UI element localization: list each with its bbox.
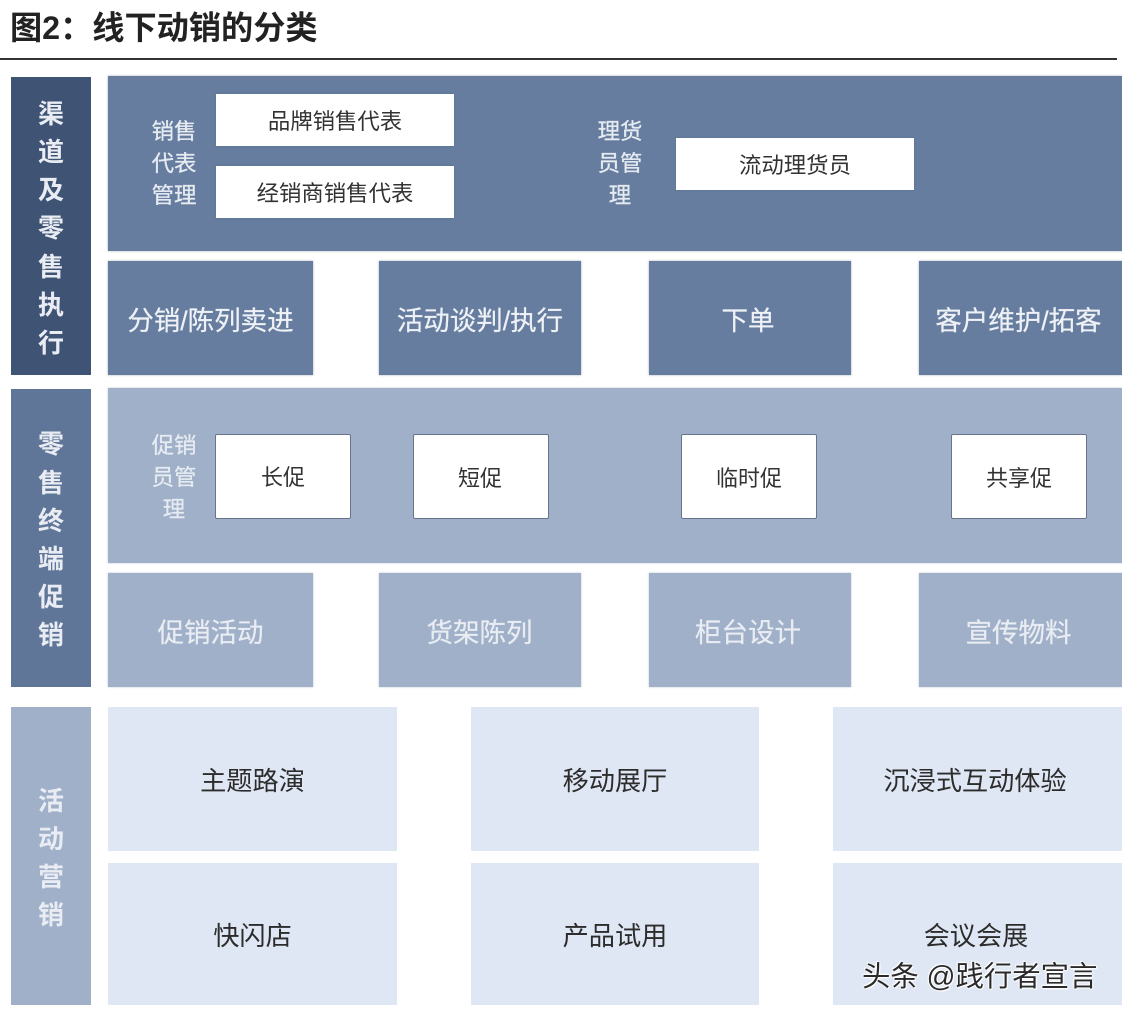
box: immersive experience: 沉浸式互动体验 [883,766,1067,796]
box: ordering [649,261,851,375]
box: shared promoter: 共享促 [986,466,1052,490]
box: mobile stock staff [676,138,914,190]
box: temporary promoter [681,434,817,519]
label: sales rep management [152,119,196,208]
heading: event marketing: 营 [38,862,64,892]
box: activity negotiation: 活动谈判/执行 [397,306,563,336]
heading: retail terminal promotion: 零 [38,429,64,459]
heading: channel and retail execution: 渠 [38,99,64,129]
label: stock staff management [598,119,642,208]
label: promoter management [152,433,196,522]
heading: channel and retail execution: 执 [38,290,64,320]
heading: retail terminal promotion: 终 [38,506,64,536]
promoter band [108,388,1122,563]
panel: channel and retail execution [11,74,1122,376]
label: promoter management: 员管 [152,465,196,490]
heading: event marketing [11,707,91,1005]
box: mobile showroom: 移动展厅 [563,766,667,796]
label: sales rep management: 销售 [152,119,196,144]
label: sales rep management: 代表 [152,151,196,176]
box: mobile showroom [471,707,759,851]
box: brand sales rep [216,94,454,146]
heading: channel and retail execution [11,77,91,375]
heading: event marketing: 动 [38,824,64,854]
heading: channel and retail execution: 售 [38,252,64,282]
panel: retail terminal promotion [11,387,1122,688]
box: mobile stock staff: 流动理货员 [739,153,851,178]
heading: retail terminal promotion: 端 [38,544,64,574]
box: conferences and exhibitions [833,863,1122,1005]
title: 图2：线下动销的分类 [10,10,318,46]
heading: channel and retail execution: 零 [38,213,64,243]
box: long-term promoter: 长促 [261,464,305,490]
box: customer maintenance: 客户维护/拓客 [935,306,1102,336]
box: pop-up store: 快闪店 [213,921,292,951]
heading: channel and retail execution: 行 [38,328,64,358]
panel: event marketing [11,707,1122,1005]
box: conferences and exhibitions: 会议会展 [924,921,1028,951]
box: product trial [471,863,759,1005]
heading: event marketing: 活 [38,786,64,816]
box: product trial: 产品试用 [563,921,667,951]
box: themed roadshow: 主题路演 [200,766,305,796]
box: distribution and display [108,261,313,375]
label: promoter management: 促销 [152,433,196,458]
box: promotional materials [919,573,1122,687]
box: ordering: 下单 [722,306,774,336]
box: distributor sales rep [216,166,454,218]
heading: retail terminal promotion: 销 [38,620,64,650]
sales and stock staff band [108,76,1122,251]
heading: retail terminal promotion: 促 [38,582,64,612]
box: immersive experience [833,707,1122,851]
box: short-term promoter: 短促 [458,466,502,490]
box: pop-up store [108,863,397,1005]
box: shared promoter [951,434,1087,519]
heading: retail terminal promotion [11,389,91,687]
box: brand sales rep: 品牌销售代表 [268,109,402,134]
label: sales rep management: 管理 [152,183,196,208]
box: short-term promoter [413,434,549,519]
box: distributor sales rep: 经销商销售代表 [257,181,413,206]
heading: channel and retail execution: 道 [38,137,64,167]
box: distribution and display: 分销/陈列卖进 [127,306,294,336]
heading: channel and retail execution: 及 [38,175,64,205]
box: promotional materials: 宣传物料 [966,618,1072,648]
label: stock staff management: 理货 [598,119,642,144]
box: counter design [649,573,851,687]
box: long-term promoter [215,434,351,519]
title rule [0,58,1117,60]
box: counter design: 柜台设计 [695,618,801,648]
box: themed roadshow [108,707,397,851]
heading: retail terminal promotion: 售 [38,468,64,498]
box: customer maintenance [919,261,1122,375]
watermark: 头条 @践行者宣言 [862,960,1097,992]
box: temporary promoter: 临时促 [716,466,782,490]
box: shelf display: 货架陈列 [426,618,532,648]
box: promotions [108,573,313,687]
heading: event marketing: 销 [38,900,64,930]
box: shelf display [379,573,581,687]
label: stock staff management: 员管 [598,151,642,176]
box: promotions: 促销活动 [158,618,264,648]
box: activity negotiation [379,261,581,375]
label: promoter management: 理 [163,497,185,522]
label: stock staff management: 理 [609,183,631,208]
